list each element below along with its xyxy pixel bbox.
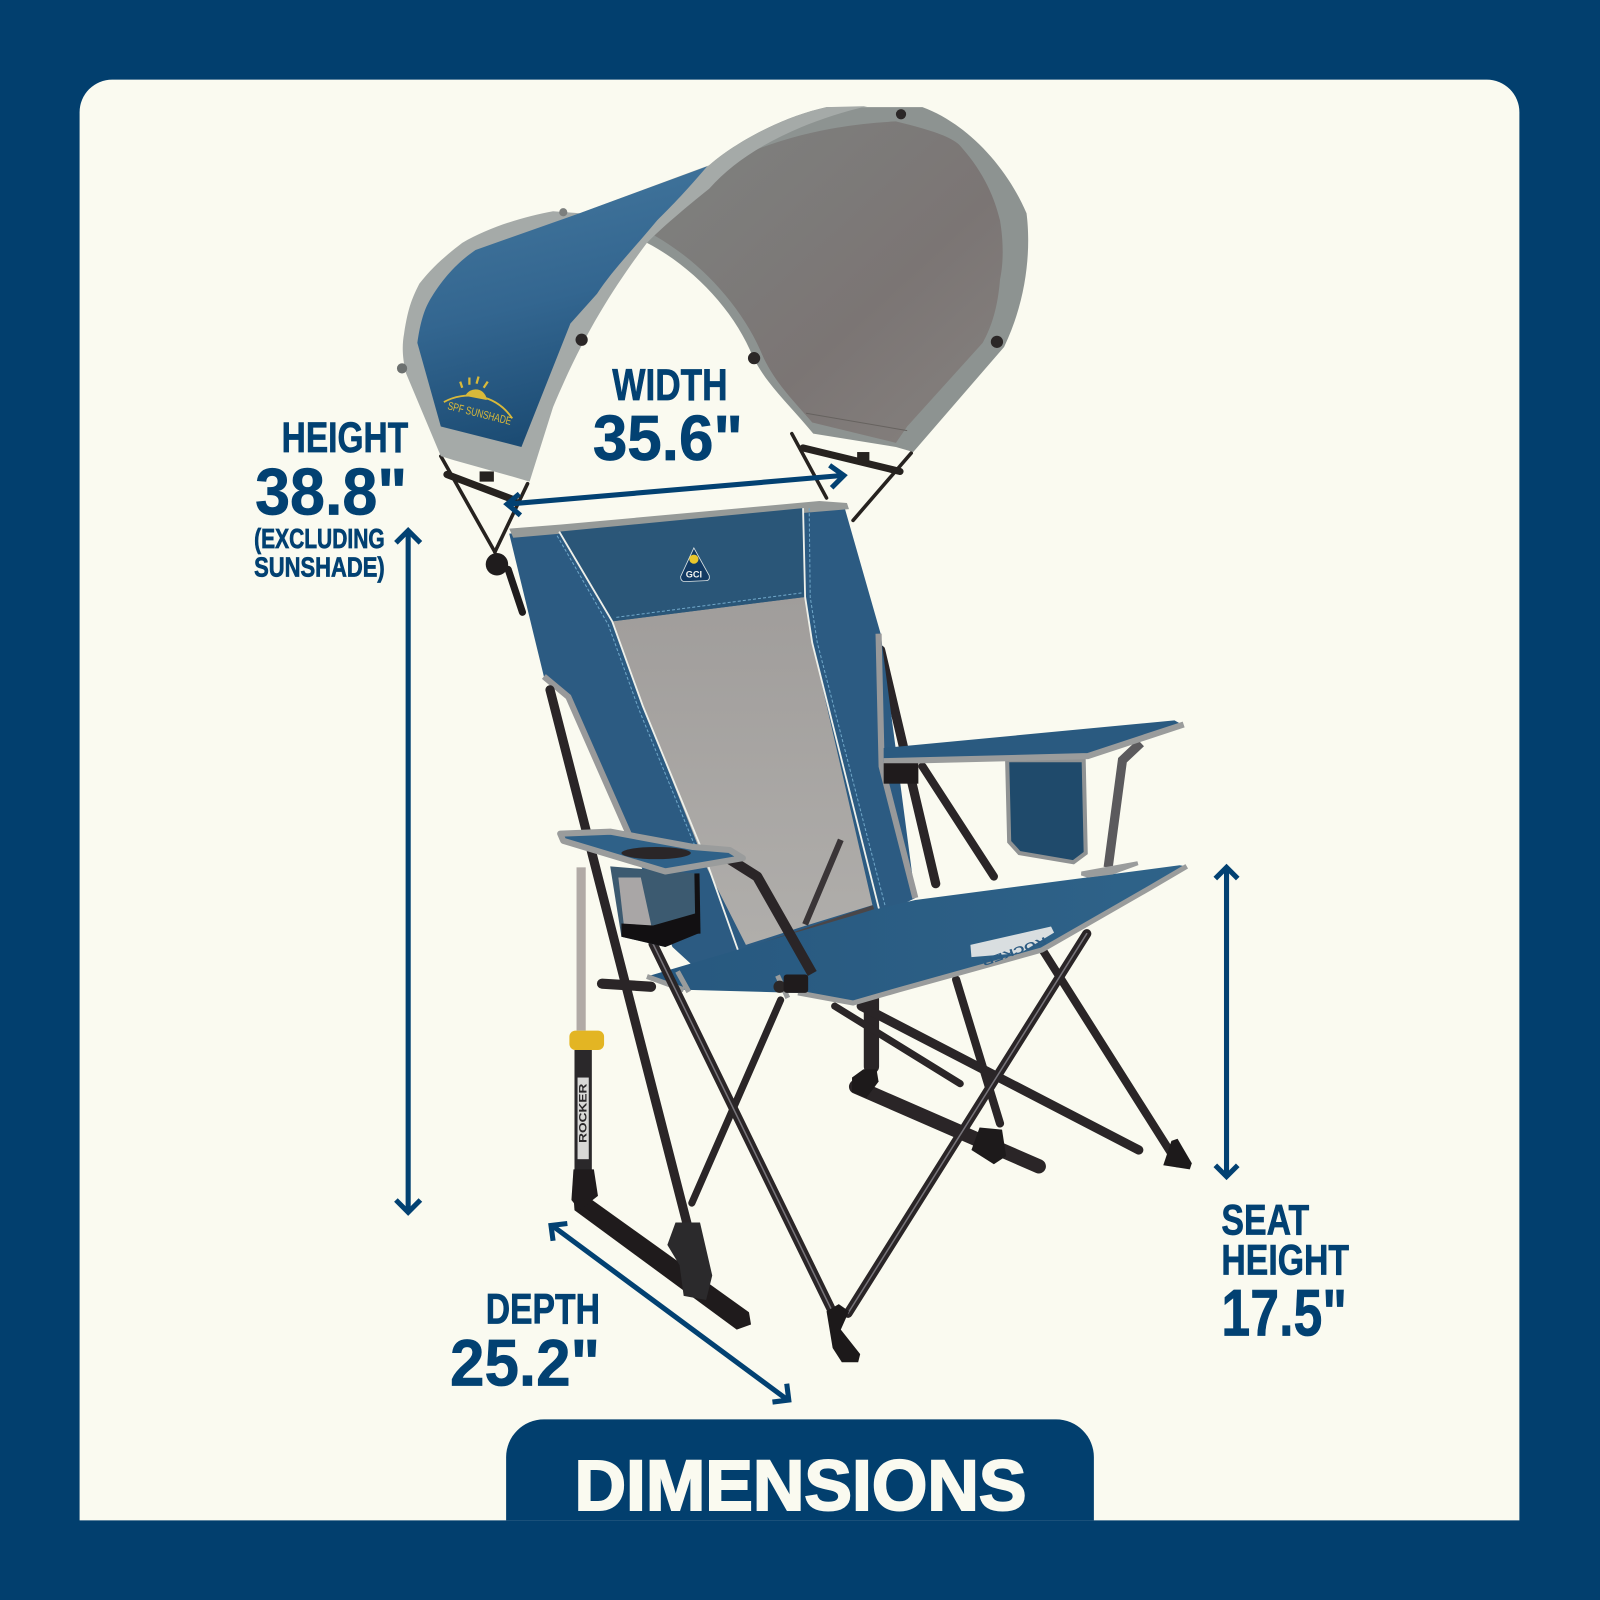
- title: dimensions: DIMENSIONS: [574, 1446, 1027, 1526]
- label: width: [593, 359, 743, 474]
- sunshade canopy: [397, 106, 1028, 612]
- drink pocket: [1007, 760, 1086, 862]
- label: depth: [450, 1285, 600, 1401]
- label: width: WIDTH: [612, 359, 728, 410]
- front chair frame: [550, 690, 860, 1362]
- arrow: depth: [551, 1223, 789, 1402]
- tube seen through mesh: [805, 840, 841, 924]
- canopy clips: [397, 109, 1003, 373]
- label: height: [254, 414, 408, 583]
- rear chair frame: [692, 650, 1192, 1313]
- header fabric panel: [559, 508, 805, 621]
- label: width: 35.6": [593, 402, 743, 474]
- cylinder body: [574, 1050, 592, 1170]
- left armrest with cup holder: [560, 832, 812, 993]
- mesh cup holder: [610, 866, 698, 947]
- arrow: width: [507, 465, 844, 515]
- armrest tube: [730, 859, 812, 973]
- label: seat height: SEAT: [1221, 1197, 1309, 1245]
- canopy blue panel: [417, 166, 707, 447]
- mesh lower shadow: [747, 907, 873, 950]
- yellow collar: [569, 1031, 604, 1050]
- SPF SunShade logo: SPF SUNSHADE: [446, 400, 512, 428]
- gas spring rocker mechanism: [569, 867, 604, 1210]
- label: height: (EXCLUDING: [254, 523, 385, 554]
- canopy underside rim: [647, 107, 1028, 452]
- SPF SunShade logo: [444, 377, 512, 428]
- chair back top band: [509, 501, 849, 538]
- GCI logo: [681, 548, 709, 582]
- chair back fabric: [509, 501, 915, 970]
- label: height: SUNSHADE): [254, 552, 385, 583]
- canopy front grey border: [403, 106, 867, 482]
- seat rocker label: ROCKER: [980, 934, 1048, 968]
- label: seat height: 17.5": [1221, 1277, 1347, 1351]
- GCI logo: GCI: [686, 570, 702, 580]
- label: seat height: [1221, 1197, 1349, 1351]
- label: height: HEIGHT: [282, 414, 408, 462]
- arrow: seat height: [1215, 867, 1238, 1177]
- side trims: [544, 634, 915, 898]
- seat rocker label: [970, 927, 1054, 968]
- gas spring rocker mechanism: ROCKER: [578, 1084, 590, 1143]
- canopy lower seam: [806, 413, 907, 431]
- stitching: [557, 508, 886, 908]
- label: seat height: HEIGHT: [1221, 1236, 1349, 1284]
- label: depth: 25.2": [450, 1327, 600, 1401]
- label: height: 38.8": [255, 455, 407, 529]
- armrest support tube: [1108, 743, 1141, 867]
- canopy inner fabric: [653, 121, 1003, 443]
- seat grey edge: [798, 866, 1187, 1003]
- title tab: [506, 1419, 1094, 1526]
- mesh back panel: [612, 597, 872, 945]
- canopy struts: [441, 434, 911, 612]
- chair seat: [647, 865, 1187, 1003]
- label: depth: DEPTH: [486, 1285, 600, 1333]
- chair photo illustration: [397, 106, 1192, 1362]
- right armrest: [884, 720, 1184, 876]
- armrest pad: [560, 832, 743, 871]
- arrow: height: [396, 531, 420, 1212]
- white piping: [559, 508, 881, 958]
